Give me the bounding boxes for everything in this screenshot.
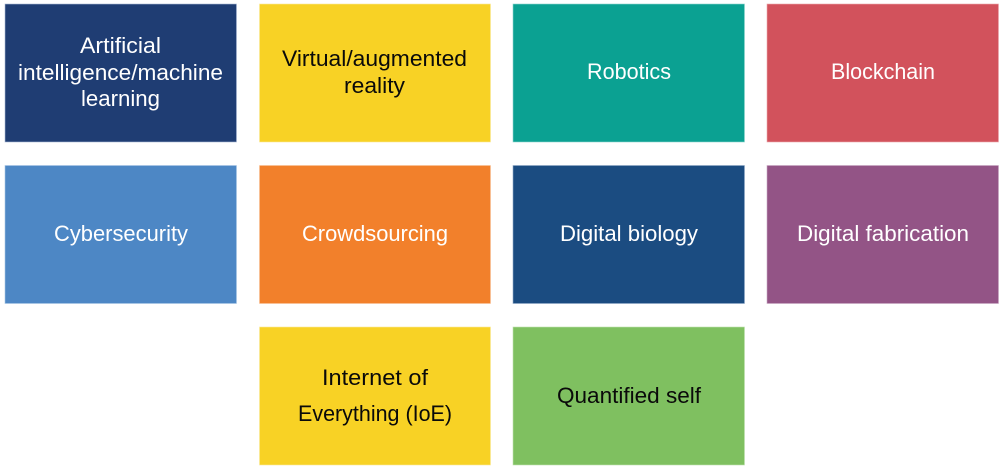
panel: Internet of Everything (IoE) [260,327,490,465]
panel: Robotics: Robotics [587,59,671,84]
panel: Robotics [513,4,744,142]
panel: Digital biology [513,166,744,304]
panel: Artificial intelligence/machine learning: learning [81,86,160,111]
panel: Internet of Everything (IoE): Everything (IoE) [298,401,452,426]
panel: Quantified self: Quantified self [557,383,702,408]
panel: Virtual/augmented reality: Virtual/augmented [282,46,467,71]
panel: Digital biology: Digital biology [560,221,699,246]
panel: Digital fabrication: Digital fabrication [797,221,969,246]
panel: Crowdsourcing: Crowdsourcing [302,221,448,246]
panel: Internet of Everything (IoE): Internet of [322,365,429,390]
panel: Virtual/augmented reality [260,4,490,142]
panel: Blockchain [767,4,998,142]
panel: Artificial intelligence/machine learning: intelligence/machine [18,60,223,85]
panel: Cybersecurity: Cybersecurity [54,221,189,246]
panel: Blockchain: Blockchain [831,59,935,84]
panel: Virtual/augmented reality: reality [344,73,406,98]
panel: Cybersecurity [5,166,236,304]
panel: Quantified self [513,327,744,465]
panel: Artificial intelligence/machine learning: Artificial [80,33,161,58]
panel: Digital fabrication [767,166,998,304]
panel: Artificial intelligence/machine learning [5,4,236,142]
panel: Crowdsourcing [260,166,490,304]
